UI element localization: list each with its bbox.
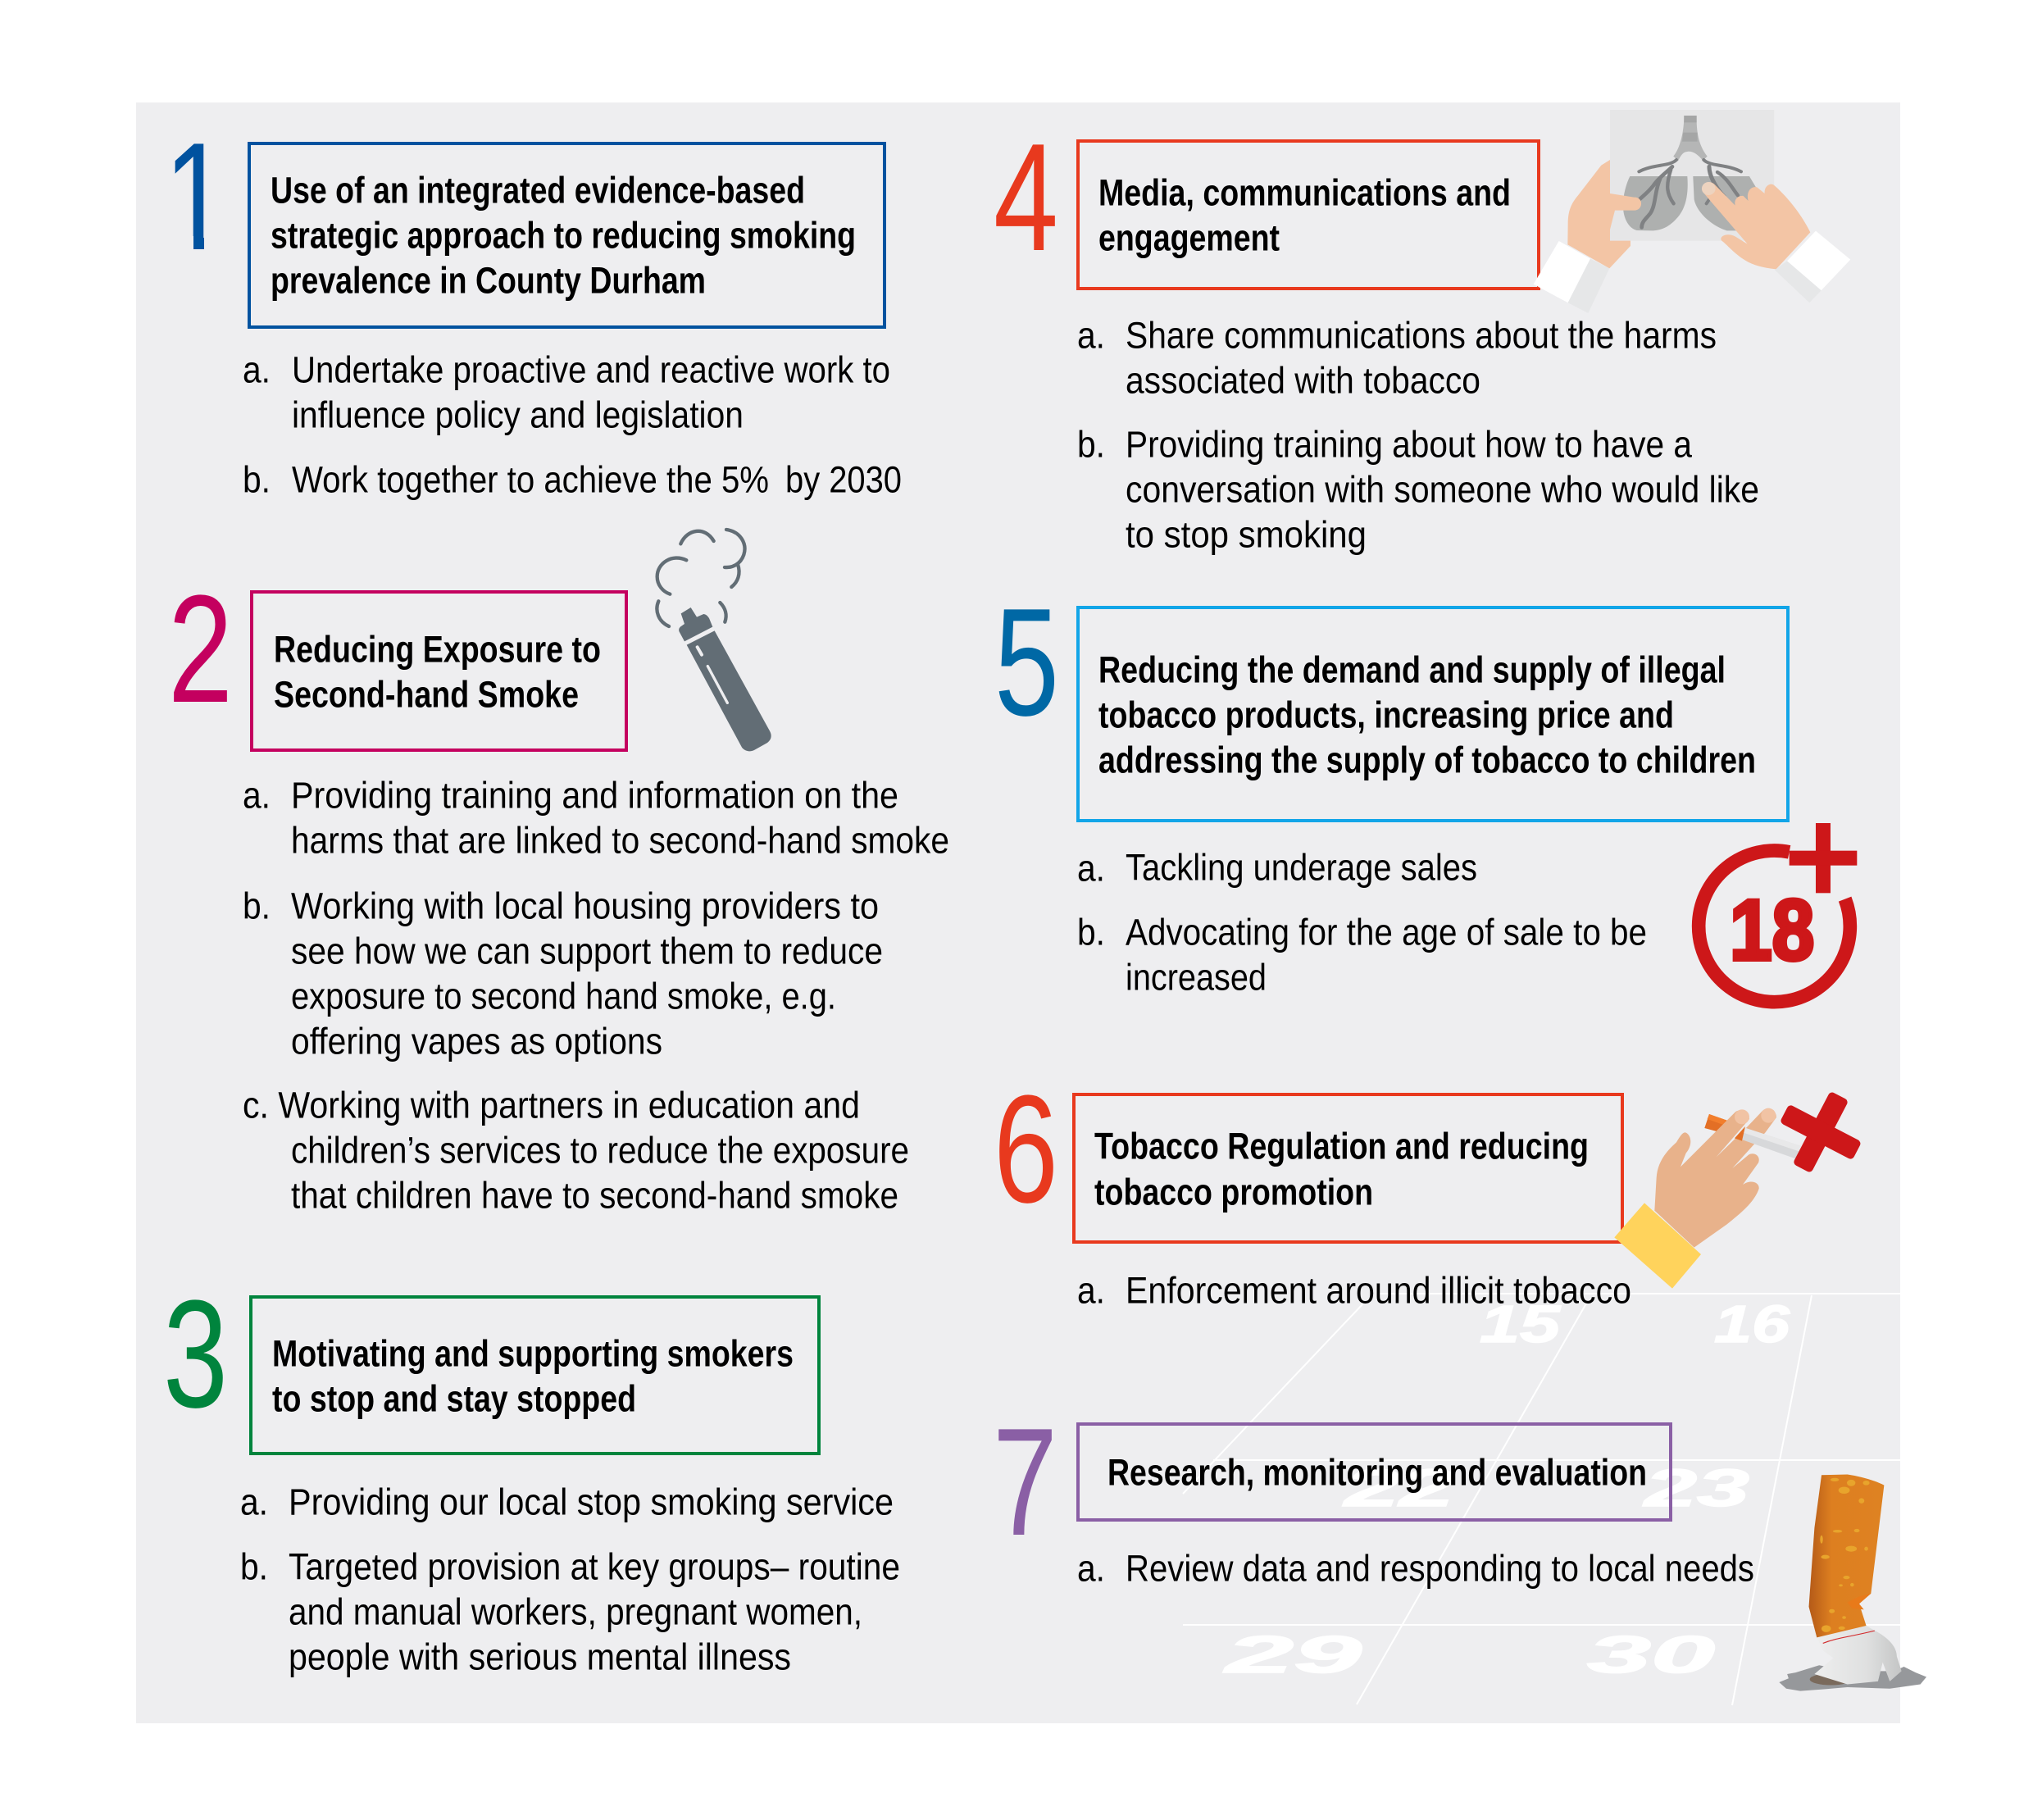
list 3: Providing our local stop smoking service (289, 1481, 894, 1523)
list 3: people with serious mental illness (289, 1636, 791, 1678)
heading box 1 (249, 143, 885, 327)
heading box 4: engagement (1098, 217, 1280, 259)
list 2: offering vapes as options (291, 1021, 662, 1062)
heading box 1: Use of an integrated evidence-based (271, 170, 805, 212)
list 1: Work together to achieve the 5% (292, 459, 769, 501)
heading box 3: to stop and stay stopped (272, 1378, 636, 1420)
icon: stubbed cigarette butt (1779, 1474, 1926, 1691)
calendar background (1183, 1294, 1900, 1705)
item 6 (994, 1063, 1876, 1312)
number 7: 7 (993, 1396, 1057, 1567)
item 1 (164, 111, 902, 501)
number 1: 1 (164, 111, 229, 282)
list 3: b. (240, 1546, 268, 1588)
number 3: 3 (163, 1268, 228, 1440)
item 2 (168, 530, 949, 1217)
calendar background: 29 (1224, 1625, 1362, 1684)
calendar background: 22 (1343, 1458, 1454, 1517)
heading box 2: Reducing Exposure to (274, 629, 601, 671)
item 5 (994, 576, 1857, 1002)
list 4: conversation with someone who would like (1126, 469, 1759, 511)
list 1: influence policy and legislation (292, 394, 744, 436)
list 2: b. (243, 885, 271, 927)
heading box 5: addressing the supply of tobacco to children (1098, 739, 1756, 781)
icon: 18 plus: 18 (1730, 882, 1814, 978)
list 4: a. (1077, 315, 1105, 357)
list 1: by 2030 (785, 459, 902, 501)
calendar background: 30 (1587, 1625, 1715, 1684)
item 4 (994, 110, 1850, 556)
number 6: 6 (994, 1063, 1058, 1235)
heading box 5 (1078, 607, 1788, 821)
heading box 2 (252, 592, 626, 750)
list 4: associated with tobacco (1126, 360, 1480, 402)
item 7 (993, 1396, 1926, 1691)
list 7: a. (1077, 1548, 1105, 1590)
list 1: a. (243, 349, 271, 391)
list 1: Undertake proactive and reactive work to (292, 349, 890, 391)
heading box 1: strategic approach to reducing smoking (271, 215, 856, 257)
list 4 (1077, 315, 1759, 556)
number 2: 2 (168, 563, 233, 735)
heading box 6 (1074, 1094, 1622, 1242)
list 2: exposure to second hand smoke, e.g. (291, 976, 836, 1017)
heading box 5: Reducing the demand and supply of illegal (1098, 649, 1726, 691)
list 2: Providing training and information on the (291, 775, 898, 817)
list 5: increased (1126, 957, 1267, 999)
list 6: Enforcement around illicit tobacco (1126, 1270, 1631, 1312)
list 4: b. (1077, 424, 1105, 466)
heading box 3: Motivating and supporting smokers (272, 1333, 794, 1375)
list 1: b. (243, 459, 271, 501)
list 5: a. (1077, 848, 1105, 890)
list 1 (243, 349, 902, 501)
item 3 (163, 1268, 900, 1678)
list 2: Working with local housing providers to (291, 885, 879, 927)
icon: 18 plus (1699, 823, 1857, 1002)
number 5: 5 (994, 576, 1059, 748)
list 2: a. (243, 775, 271, 817)
list 5: Advocating for the age of sale to be (1126, 912, 1647, 953)
heading box 6: tobacco promotion (1094, 1172, 1373, 1213)
icon: hand with crossed-out cigarette (1614, 1077, 1876, 1289)
number 4: 4 (994, 111, 1058, 283)
list 6: a. (1077, 1270, 1105, 1312)
list 4: Share communications about the harms (1126, 315, 1717, 357)
heading box 5: tobacco products, increasing price and (1098, 694, 1674, 736)
background panel (136, 102, 1900, 1723)
heading box 6: Tobacco Regulation and reducing (1094, 1126, 1589, 1167)
list 2: see how we can support them to reduce (291, 930, 883, 972)
list 3: a. (240, 1481, 268, 1523)
list 3: Targeted provision at key groups– routine (289, 1546, 900, 1588)
icon: hands holding lung x-ray (1534, 110, 1850, 313)
heading box 7 (1078, 1424, 1671, 1520)
heading box 3 (251, 1297, 819, 1454)
list 7: Review data and responding to local needs (1126, 1548, 1754, 1590)
heading box 1: prevalence in County Durham (271, 260, 706, 302)
heading box 4 (1078, 141, 1539, 289)
list 2: harms that are linked to second-hand smoke (291, 820, 949, 862)
list 3: and manual workers, pregnant women, (289, 1591, 862, 1633)
icon: vape (657, 530, 771, 751)
list 5: Tackling underage sales (1126, 847, 1477, 889)
list 4: to stop smoking (1126, 514, 1367, 556)
calendar background: 15 (1480, 1294, 1562, 1354)
heading box 4: Media, communications and (1098, 172, 1511, 214)
list 2: that children have to second-hand smoke (291, 1175, 898, 1217)
list 2: children’s services to reduce the exposure (291, 1130, 909, 1172)
list 5 (1077, 847, 1647, 999)
calendar background: 16 (1714, 1294, 1790, 1354)
list 2: c. Working with partners in education and (243, 1085, 860, 1126)
heading box 7: Research, monitoring and evaluation (1107, 1452, 1647, 1494)
calendar background: 23 (1643, 1458, 1749, 1517)
list 5: b. (1077, 912, 1105, 953)
heading box 2: Second-hand Smoke (274, 674, 579, 716)
list 2 (243, 775, 949, 1217)
list 3 (240, 1481, 900, 1678)
list 4: Providing training about how to have a (1126, 424, 1693, 466)
